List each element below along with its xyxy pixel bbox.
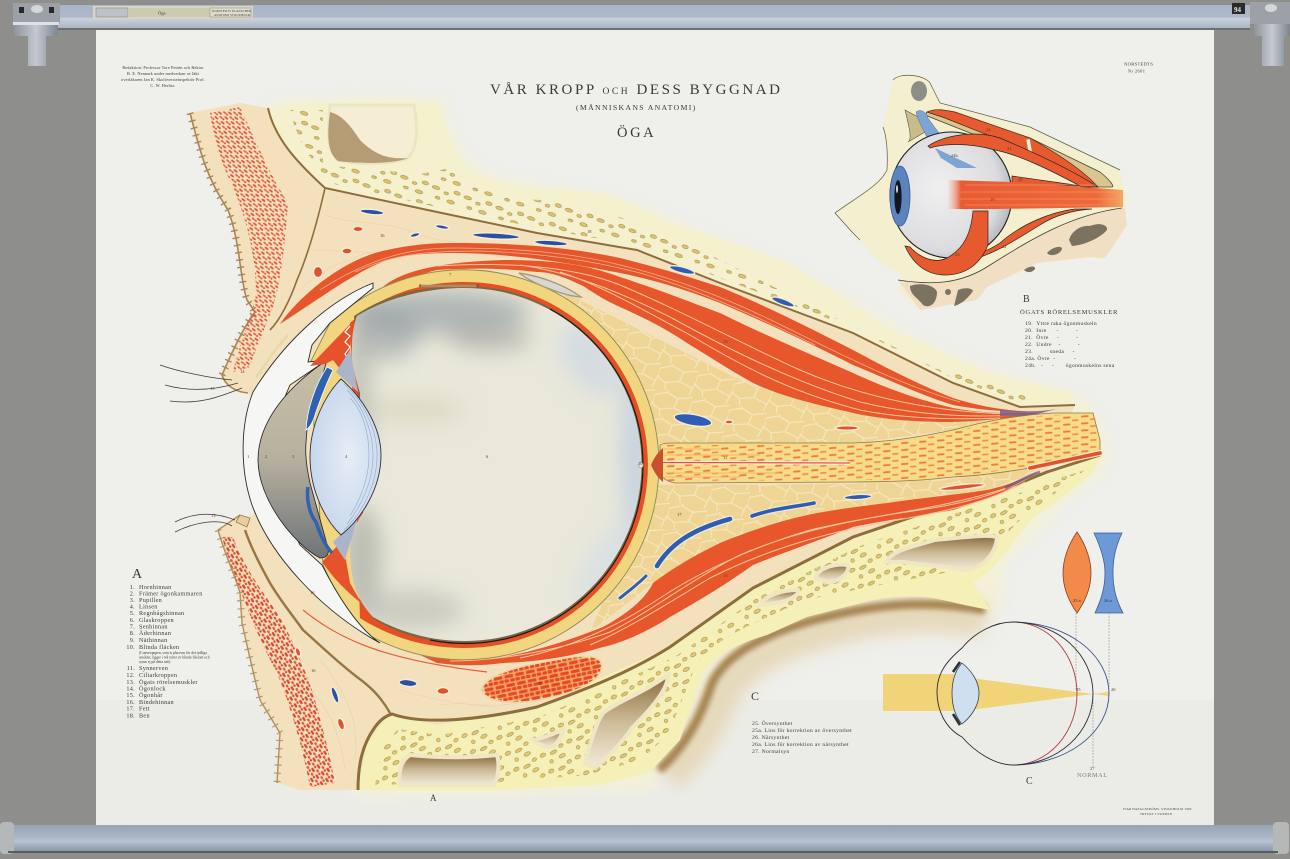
- bone halo shadow: [268, 96, 1110, 798]
- muscle numbers B: 20: [1018, 177, 1023, 182]
- legend A: (Convexpupen, som is placeras för det tydliga: [139, 651, 207, 656]
- skin red fat upper: [210, 107, 288, 372]
- legend A: 7.: [130, 624, 135, 630]
- small bone cavities: [910, 224, 1107, 306]
- legend A: Ögats rörelsemuskler: [139, 679, 198, 686]
- part numbers: 15: [211, 513, 216, 518]
- legend A: ansiktet, ligger i två tolter av blinda fläcken och: [139, 654, 210, 660]
- lens: [310, 379, 381, 535]
- legend A: Glaskroppen: [139, 617, 174, 624]
- skull outline B: [835, 75, 1127, 310]
- superior rectus B: [928, 134, 1098, 187]
- legend A: 16.: [126, 699, 135, 706]
- thin lower muscle line: [303, 610, 487, 672]
- top hanging rail: ANATOMI STOCKHOLM: [214, 13, 251, 17]
- muscle numbers B: 24b: [951, 153, 958, 158]
- printer imprint: TRYCKT I SWEDEN: [1140, 812, 1173, 816]
- legend A: 15.: [126, 692, 135, 699]
- part numbers: 9: [477, 283, 480, 288]
- black normal outline: [937, 622, 1093, 765]
- editor credit: Redaktion: Professor Tore Petrén och Rektor: [122, 65, 204, 70]
- eyelashes: [160, 365, 242, 532]
- legend A: 13.: [126, 679, 135, 686]
- part numbers: 15: [210, 386, 215, 391]
- central retinal vessel: [660, 461, 850, 465]
- correction lenses: 26 a: [1104, 598, 1112, 603]
- legend A: 1.: [130, 584, 135, 591]
- lateral rectus B: [947, 180, 1123, 209]
- choroid: [350, 282, 648, 648]
- bone pits lower: [375, 470, 1085, 785]
- legend B: 21. Övre - -: [1025, 334, 1078, 341]
- superior muscle tendon: [1000, 408, 1060, 416]
- legend B: B: [1023, 294, 1030, 305]
- lacrimal notch: [905, 110, 925, 142]
- legend A: Ögonhår: [139, 692, 163, 699]
- ciliary body upper: [310, 322, 352, 369]
- tendon on eyeball: [935, 148, 977, 168]
- legend A: Främer ögonkammaren: [139, 590, 203, 598]
- oblique trochlea: [1026, 139, 1032, 152]
- lower maxillary bone: [358, 455, 1100, 790]
- legend C: 25. Översynthet: [752, 720, 793, 727]
- publisher mark: [1124, 62, 1153, 74]
- legend A: 2.: [130, 590, 135, 598]
- legend A: A: [132, 567, 143, 582]
- editor credit: B. E. Nennark under medverkan av läkt: [127, 71, 200, 76]
- legend C: 26a. Lins för korrektion av närsynthet: [752, 741, 849, 748]
- legend A: Näthinnan: [139, 637, 167, 644]
- dark retinal line: [430, 309, 643, 643]
- legend A: Linsen: [139, 604, 158, 610]
- panel C: refraction diagram: [883, 613, 1116, 787]
- tendon of superior oblique: [519, 273, 581, 297]
- legend A: 5.: [130, 610, 135, 617]
- muscle numbers B: 22: [1002, 244, 1006, 249]
- top hanging rail: NORSTEDTS PLANSCHER: [212, 9, 251, 13]
- legend C: 27. Normalsyn: [752, 749, 789, 755]
- legend C: C: [751, 689, 759, 703]
- panel C: refraction diagram: 25: [1076, 687, 1081, 692]
- orbital vessels: [294, 208, 985, 731]
- sclera: [310, 270, 659, 660]
- convex lens 25a: [1063, 532, 1091, 613]
- part numbers: 1: [247, 454, 249, 459]
- sheath line lower tendon: [1005, 472, 1040, 488]
- optic nerve: [660, 413, 1100, 483]
- legend A: 14.: [126, 686, 135, 692]
- vitreous body: [350, 288, 641, 641]
- upper frontal bone: [268, 102, 1075, 407]
- inferior rectus B: [950, 209, 1092, 262]
- curved blue veins: [620, 503, 814, 598]
- legend C: 25a. Lins för korrektion av översynthet: [752, 727, 852, 734]
- part numbers: 7: [449, 272, 452, 277]
- iris: [890, 166, 910, 226]
- retrobulbar fat: [560, 290, 1040, 632]
- title block: VÅR KROPP OCH DESS BYGGNAD: [490, 82, 783, 98]
- title block: (MÄNNISKANS ANATOMI): [576, 103, 697, 112]
- bottom rod: [0, 822, 1289, 854]
- orbit floor bone: [898, 208, 1127, 310]
- orbit soft tissue: [190, 103, 1075, 790]
- right bracket and tag: [1232, 2, 1290, 66]
- part numbers: 2: [265, 454, 267, 459]
- legend A: Fett: [139, 706, 150, 712]
- superior oblique muscle: [927, 110, 1098, 187]
- oblique tendon blue: [916, 111, 977, 168]
- legend B: 22. Undre - -: [1025, 342, 1080, 348]
- panel C: refraction diagram: 27: [1090, 766, 1095, 771]
- legend A: 4.: [130, 604, 135, 610]
- part numbers: 13: [723, 573, 728, 578]
- legend B: 24a. Övre - -: [1025, 355, 1076, 362]
- legend A: 8.: [130, 630, 135, 637]
- part numbers: 16: [311, 668, 316, 673]
- muscle numbers B: 19: [990, 197, 995, 202]
- publisher mark: Nr 2601: [1128, 68, 1145, 74]
- legend A: Ciliarkroppen: [139, 672, 177, 679]
- legend A: Pupillen: [139, 597, 162, 604]
- editor credit: overläkaren Jan K. Skolöversteinspektör Prof.: [121, 77, 205, 82]
- legend B: 24b. - - ögonmuskelns sena: [1025, 363, 1115, 369]
- cornea and conjunctiva: [243, 283, 380, 643]
- part numbers: 13: [723, 339, 728, 344]
- part numbers: 17: [677, 512, 682, 517]
- legend A: Bindehinnan: [139, 699, 174, 706]
- legend A: Ben: [139, 712, 150, 720]
- top hanging rail: [58, 5, 1250, 30]
- legend A: 9.: [130, 637, 135, 644]
- muscle numbers B: 24: [986, 127, 991, 132]
- brown shadow below lower bone: [659, 604, 985, 777]
- part numbers: 6: [486, 454, 489, 459]
- anterior chamber: [258, 360, 328, 558]
- light beam: [883, 674, 1109, 711]
- legend C: 26. Närsynthet: [752, 735, 790, 741]
- retina band: [354, 286, 644, 643]
- part numbers: 11: [723, 455, 727, 460]
- part numbers: [210, 229, 728, 686]
- part numbers: 14: [240, 369, 245, 374]
- legend A: rynas ej på detta sätt): [139, 659, 171, 664]
- inferior rectus muscle: [387, 472, 1037, 665]
- legend A: Ögonlock: [139, 686, 166, 692]
- orbit roof band: [925, 112, 1113, 187]
- legend A: 17.: [126, 706, 135, 712]
- muscle numbers B: 23: [955, 252, 960, 257]
- legend A: Regnbågshinnan: [139, 610, 184, 617]
- part numbers: 18: [587, 229, 592, 234]
- right bracket and tag: 94: [1234, 6, 1242, 14]
- panel label A: A: [430, 793, 437, 803]
- legend A: Senhinnan: [139, 624, 168, 630]
- editor credit: C. W. Herlitz.: [150, 83, 176, 88]
- pupil: [894, 180, 902, 214]
- legend B: ÖGATS RÖRELSEMUSKLER: [1020, 309, 1118, 316]
- top hanging rail: Öga: [158, 10, 166, 16]
- correction lenses: [1063, 532, 1123, 613]
- legend A: 11.: [127, 665, 135, 672]
- panel C: refraction diagram: NORMAL: [1077, 772, 1108, 779]
- legend C: [751, 689, 852, 755]
- legend A: [126, 567, 210, 720]
- correction lenses: 25 a: [1073, 598, 1081, 603]
- panel C: refraction diagram: 26: [1111, 687, 1116, 692]
- legend B: [1020, 294, 1118, 369]
- part numbers: 16: [380, 233, 385, 238]
- dashed guide lines: [1076, 613, 1109, 767]
- lacrimal fat lump: [482, 657, 601, 701]
- eyelid margins: [236, 515, 250, 527]
- vitreous shading: [340, 290, 650, 630]
- skin red fat lower: [222, 537, 335, 787]
- panel B: eye muscles: [835, 75, 1127, 310]
- printer imprint: [1123, 806, 1192, 816]
- bone pits upper: [290, 110, 1040, 402]
- legend A: Synnerven: [139, 665, 168, 672]
- legend A: 3.: [130, 597, 135, 604]
- part numbers: 3: [292, 454, 295, 459]
- concave lens 26a: [1094, 533, 1123, 613]
- frontal sinus: [328, 105, 416, 164]
- eyeball: [890, 132, 1012, 258]
- levator muscle: [280, 243, 1040, 412]
- title block: ÖGA: [617, 124, 656, 141]
- legend A: Blinda fläcken: [139, 644, 179, 651]
- legend B: 19. Yttre raka ögonmuskeln: [1025, 321, 1097, 327]
- optic disc: [651, 448, 663, 482]
- lower sinuses: [399, 536, 997, 785]
- skin teeth edges: [190, 113, 255, 375]
- muscle numbers B: [951, 127, 1023, 257]
- printer imprint: IVAR HAEGGSTRÖMS, STOCKHOLM 1960: [1123, 806, 1192, 812]
- legend B: 23. sneda -: [1025, 349, 1075, 355]
- brown retina tag at top: [419, 285, 476, 287]
- tarsal gland upper: [256, 335, 288, 378]
- muscle numbers B: 21: [1007, 146, 1012, 151]
- lens C: [952, 663, 979, 724]
- nerve artery: [1030, 453, 1100, 468]
- inferior oblique B: [905, 211, 988, 275]
- ciliary body lower: [322, 543, 362, 604]
- red hyperopic outline: [1013, 622, 1077, 765]
- legend A: 18.: [126, 712, 135, 720]
- blue myopic eye outline: [1013, 622, 1109, 765]
- publisher mark: NORSTEDTS: [1124, 62, 1153, 66]
- title block: [490, 82, 783, 141]
- part numbers: 18: [537, 681, 542, 686]
- zonule fibres: [333, 350, 358, 560]
- editor credit: [121, 65, 205, 88]
- part numbers: 16: [310, 590, 315, 595]
- legend B: 20. Inre - -: [1025, 328, 1078, 334]
- part numbers: 10: [638, 461, 643, 466]
- part numbers: 8: [419, 283, 422, 288]
- superior rectus muscle: [383, 260, 1040, 422]
- left bracket: [13, 3, 60, 66]
- iris upper: [306, 367, 333, 430]
- panel C: refraction diagram: C: [1026, 776, 1033, 787]
- legend A: 10.: [126, 644, 135, 651]
- periosteum lines: [268, 108, 1075, 407]
- iris lower: [307, 487, 332, 553]
- tissue wave lines: [250, 215, 620, 770]
- legend A: Åderhinnan: [139, 629, 171, 637]
- legend A: Hornhinnan: [139, 584, 172, 591]
- panel A: eye cross-section: [160, 96, 1110, 798]
- medial rectus B: [1012, 176, 1082, 186]
- part numbers: 4: [345, 454, 348, 459]
- iris C: [953, 662, 960, 725]
- legend A: 12.: [126, 672, 135, 679]
- legend A: 6.: [130, 617, 135, 624]
- ciliary teeth upper: [345, 326, 350, 362]
